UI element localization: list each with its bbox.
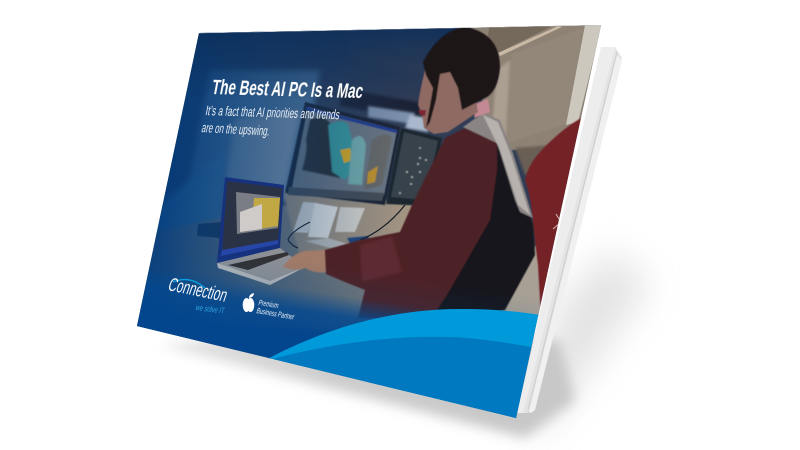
logo: Connection: Connection: [165, 275, 230, 306]
woman torso: [325, 113, 535, 320]
partner label: [256, 300, 295, 320]
left blue overlay: [137, 30, 392, 359]
cables: [288, 205, 405, 248]
subtitle: are on the upswing.: [200, 120, 271, 139]
ground shadow: [160, 250, 650, 440]
icon: apple logo: [243, 293, 254, 312]
hand: [283, 250, 327, 272]
title: The Best AI PC Is a Mac: [210, 76, 365, 103]
dark blue wave: [273, 336, 532, 418]
partner label: Business Partner: [255, 306, 296, 322]
brochure mockup: [137, 25, 648, 443]
logo: Connection: [169, 278, 227, 314]
wall: [470, 22, 610, 150]
top edge highlight: [199, 25, 601, 33]
laptop: [217, 177, 305, 285]
inner pages: [517, 47, 622, 413]
cover: [130, 20, 610, 430]
woman head: [418, 27, 500, 134]
logo: Connection: we solve IT: [194, 302, 226, 316]
main monitor: [285, 102, 400, 205]
desk: [138, 204, 552, 324]
subtitle: [200, 103, 341, 139]
second monitor: [386, 128, 442, 206]
paper stands: [293, 202, 372, 249]
bottom blue fade: [137, 263, 540, 418]
cover photo: office scene: [130, 20, 610, 430]
light blue wave: [269, 309, 538, 418]
chair: [504, 246, 541, 318]
subtitle: It’s a fact that AI priorities and trends: [204, 103, 341, 122]
arrow: next chevron: [553, 214, 561, 229]
partner label: Premium: [257, 298, 280, 310]
